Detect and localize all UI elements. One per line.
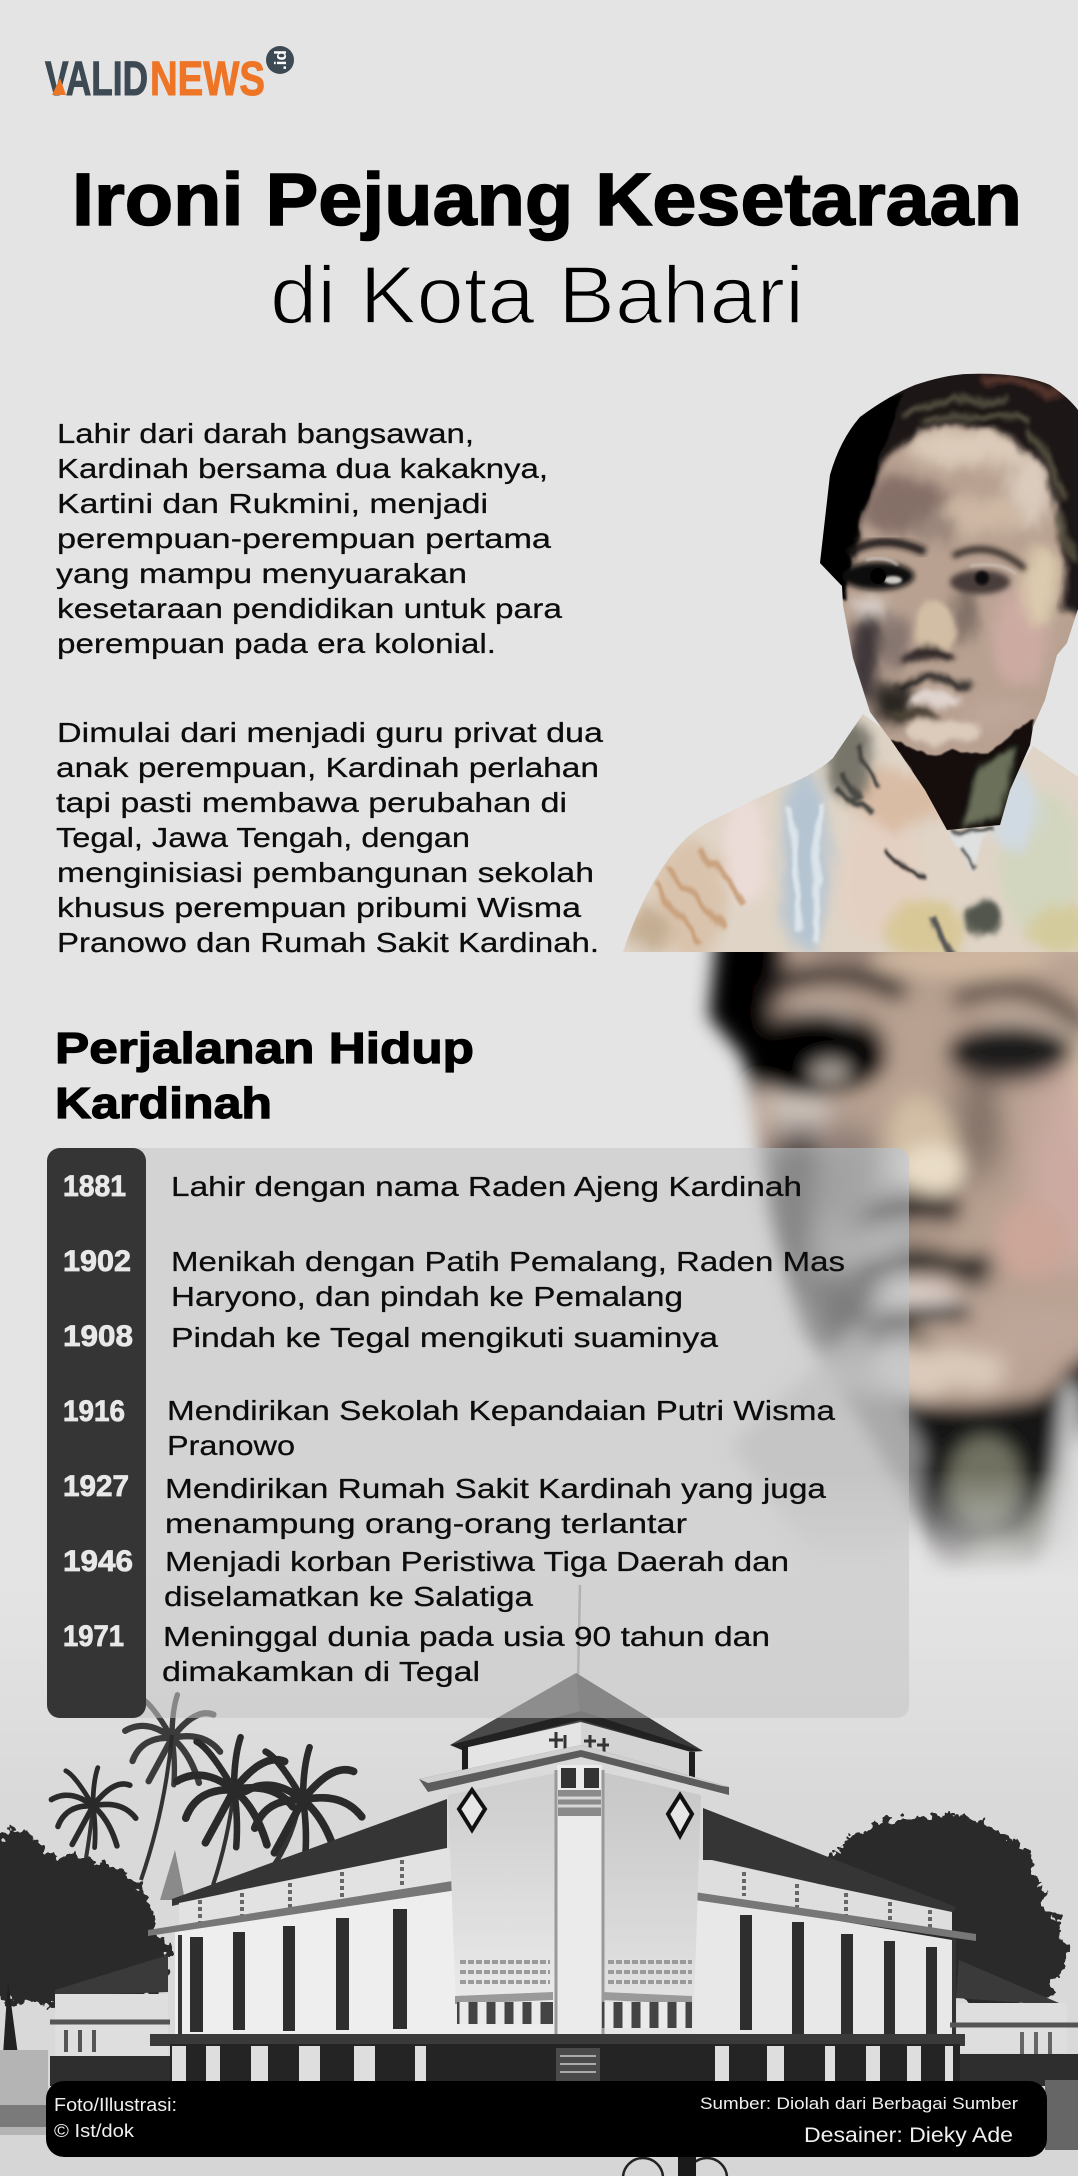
portrait: Kardinah	[623, 374, 1078, 952]
photo credit: © Ist/dok	[54, 2121, 135, 2141]
timeline descriptions: diselamatkan ke Salatiga	[164, 1581, 534, 1612]
tower signage and grilles	[460, 1962, 692, 1982]
tower roof	[450, 1673, 703, 1751]
tower body	[448, 1772, 560, 2034]
photo: Kantor Pos Tegal building	[0, 1540, 1078, 2176]
logo: Validnews.id	[45, 46, 294, 106]
timeline panel	[47, 1148, 909, 1718]
intro paragraph 2: Pranowo dan Rumah Sakit Kardinah.	[57, 927, 599, 958]
left pavilion	[55, 1955, 168, 1996]
footer bar	[46, 2081, 1047, 2157]
year column: 1902	[63, 1245, 131, 1278]
intro paragraph 1: perempuan-perempuan pertama	[57, 523, 552, 554]
mast	[578, 1585, 580, 1680]
photo credit	[54, 2095, 177, 2141]
trees	[0, 1695, 1066, 2070]
timeline descriptions: Menikah dengan Patih Pemalang, Raden Mas	[171, 1246, 845, 1277]
timeline descriptions: Pindah ke Tegal mengikuti suaminya	[171, 1322, 719, 1353]
year column: 1946	[63, 1545, 133, 1578]
year column: 1908	[63, 1320, 133, 1353]
intro paragraph 2: khusus perempuan pribumi Wisma	[57, 892, 582, 923]
vehicles and street	[0, 2086, 1078, 2176]
title: Ironi Pejuang Kesetaraan	[72, 158, 1022, 241]
intro paragraph 1: yang mampu menyuarakan	[56, 558, 467, 589]
intro paragraph 1	[56, 418, 563, 659]
diamonds	[459, 1790, 485, 1830]
timeline descriptions: menampung orang-orang terlantar	[165, 1508, 687, 1539]
heading: Perjalanan Hidup Kardinah: Kardinah	[55, 1079, 272, 1128]
timeline descriptions: Lahir dengan nama Raden Ajeng Kardinah	[171, 1171, 802, 1202]
timeline descriptions: Mendirikan Rumah Sakit Kardinah yang juga	[165, 1473, 827, 1504]
source and designer	[700, 2094, 1018, 2147]
right wing	[703, 1808, 956, 1914]
right pavilion	[956, 1960, 1066, 2006]
year column	[47, 1148, 146, 1718]
photo credit: Foto/Illustrasi:	[54, 2095, 177, 2115]
intro paragraph 1: Kartini dan Rukmini, menjadi	[57, 488, 488, 519]
timeline descriptions: Meninggal dunia pada usia 90 tahun dan	[163, 1621, 770, 1652]
intro paragraph 2: Tegal, Jawa Tengah, dengan	[56, 822, 470, 853]
title	[72, 158, 1022, 341]
intro paragraph 1: Lahir dari darah bangsawan,	[57, 418, 474, 449]
timeline descriptions: Pranowo	[167, 1430, 295, 1461]
intro paragraph 1: Kardinah bersama dua kakaknya,	[57, 453, 548, 484]
left wing	[172, 1799, 447, 1906]
logo: Validnews.id: .id	[271, 50, 290, 70]
intro paragraph 2: tapi pasti membawa perubahan di	[56, 787, 567, 818]
timeline descriptions: Menjadi korban Peristiwa Tiga Daerah dan	[165, 1546, 789, 1577]
kebaya	[623, 714, 1078, 952]
source and designer: Sumber: Diolah dari Berbagai Sumber	[700, 2094, 1018, 2113]
title: di Kota Bahari	[270, 250, 804, 341]
timeline descriptions: Mendirikan Sekolah Kepandaian Putri Wisma	[167, 1395, 835, 1426]
ground floor	[150, 2034, 965, 2046]
intro paragraph 1: kesetaraan pendidikan untuk para	[57, 593, 563, 624]
timeline descriptions: Haryono, dan pindah ke Pemalang	[171, 1281, 683, 1312]
tower cornice	[419, 1745, 729, 1795]
intro paragraph 1: perempuan pada era kolonial.	[57, 628, 496, 659]
panel background	[47, 1148, 909, 1718]
heading: Perjalanan Hidup Kardinah	[55, 1024, 474, 1128]
year column: 1971	[63, 1620, 124, 1653]
intro paragraph 2: anak perempuan, Kardinah perlahan	[56, 752, 599, 783]
blurred enlarged portrait background	[694, 952, 1078, 1572]
heading: Perjalanan Hidup Kardinah: Perjalanan Hidup	[55, 1024, 474, 1073]
timeline descriptions	[162, 1171, 845, 1687]
intro paragraph 2	[56, 717, 604, 958]
logo: Validnews.id: VALID	[45, 53, 148, 106]
source and designer: Desainer: Dieky Ade	[804, 2124, 1013, 2147]
timeline descriptions: dimakamkan di Tegal	[162, 1656, 480, 1687]
year column: 1916	[63, 1395, 125, 1428]
tower top block	[464, 1722, 581, 1778]
intro paragraph 2: Dimulai dari menjadi guru privat dua	[57, 717, 604, 748]
year column: 1927	[63, 1470, 129, 1503]
intro paragraph 2: menginisiasi pembangunan sekolah	[57, 857, 594, 888]
year column: 1881	[63, 1170, 126, 1203]
logo: Validnews.id: NEWS	[150, 53, 265, 106]
